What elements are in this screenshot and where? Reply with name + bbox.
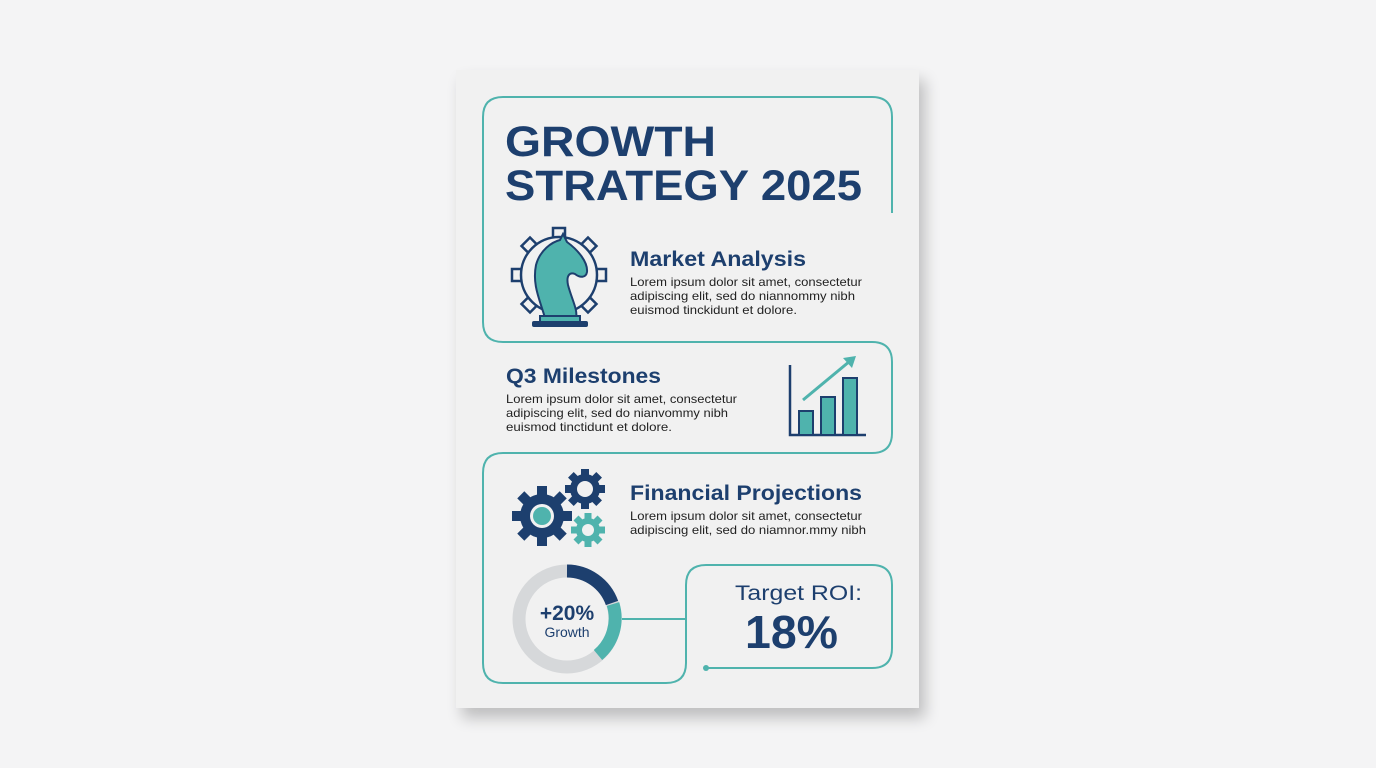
title: STRATEGY 2025 [505,162,862,210]
page [456,70,919,708]
icon: knight in gear [512,228,606,327]
donut chart [519,571,615,667]
heading: Financial Projections: Financial Projections [630,482,862,505]
text: financial body: Lorem ipsum dolor sit amet, consectetur [630,509,862,523]
text: market analysis body: euismod tinckidunt et dolore. [630,303,797,317]
heading: Q3 Milestones: Q3 Milestones [506,365,661,388]
text: market analysis body: adipiscing elit, sed do niannommy nibh [630,289,855,303]
text: q3 body [506,392,737,434]
panel outlines [483,97,892,683]
text: financial body: adipiscing elit, sed do niamnor.mmy nibh [630,523,866,537]
donut chart: Growth [544,624,590,640]
text: market analysis body [630,275,862,317]
text: q3 body: adipiscing elit, sed do nianvommy nibh [506,406,728,420]
title [505,118,862,210]
text: financial body [630,509,866,537]
donut chart: +20% [540,602,594,625]
text: q3 body: euismod tinctidunt et dolore. [506,420,672,434]
callout: target ROI [735,582,862,658]
callout: target ROI: Target ROI: [735,582,862,605]
dot connector [703,665,709,671]
icon: bar chart [790,356,866,435]
heading: Market Analysis: Market Analysis [630,248,806,271]
title: GROWTH [505,118,716,166]
text: market analysis body: Lorem ipsum dolor sit amet, consectetur [630,275,862,289]
text: q3 body: Lorem ipsum dolor sit amet, consectetur [506,392,737,406]
icon: gears [512,469,605,547]
callout: target ROI: 18% [745,606,838,658]
